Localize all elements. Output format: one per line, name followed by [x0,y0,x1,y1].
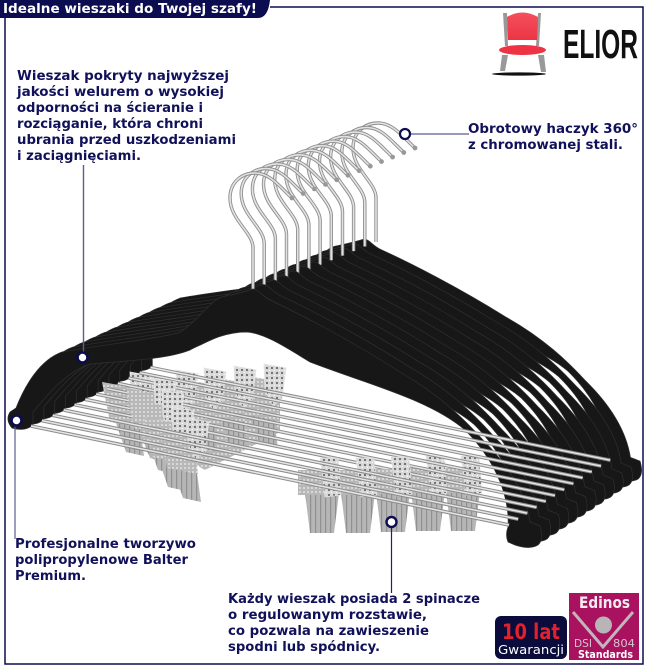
text: rotating hook description: z chromowanej stali. [468,138,623,153]
badge: 10 year warranty: Gwarancji [498,642,564,657]
badge: Edinos DSI 804 standards: Standards [578,648,633,661]
text: velour description: rozciąganie, która chroni [17,117,203,132]
callout: polypropylene marker and leader [12,416,22,539]
text: rotating hook description: Obrotowy haczyk 360° [468,122,638,137]
rear rods [74,367,610,501]
text: rotating hook description [468,122,638,153]
badge: Edinos DSI 804 standards: Edinos [579,593,630,612]
text: clips description [228,592,480,655]
text: polypropylene description: Premium. [15,569,86,584]
text: clips description: o regulowanym rozstawie, [228,608,427,623]
text: velour description: i zaciągnięciami. [17,149,141,164]
front clips, right group [298,457,412,533]
text: velour description: jakości welurem o wysokiej [16,85,224,100]
hanger stack illustration [8,123,642,548]
text: velour description [16,69,236,164]
text: polypropylene description: Profesjonalne tworzywo [15,537,196,552]
text: polypropylene description [15,537,196,584]
title banner: Idealne wieszaki do Twojej szafy! [3,2,257,17]
text: clips description: co pozwala na zawieszenie [228,624,429,639]
icon: red chair [492,12,546,76]
logo: Elior chair and wordmark [492,12,638,76]
rear clips, right group [404,456,482,531]
badge: Edinos DSI 804 standards [569,593,639,661]
text: clips description: spodni lub spódnicy. [228,640,380,655]
callout: velour marker and leader [78,165,88,362]
text: velour description: odporności na ścieranie i [17,101,203,116]
callout: clip marker and leader [386,517,396,593]
badge: Edinos DSI 804 standards: 804 [613,637,635,650]
text: velour description: ubrania przed uszkodzeniami [17,133,236,148]
text: polypropylene description: polipropylenowe Balter [15,553,189,568]
badge: 10 year warranty: 10 lat [502,620,560,644]
front rods [31,410,537,525]
callout: hook marker and leader [400,129,469,139]
hanger bodies and hooks [8,123,642,548]
front clips, left group [126,378,209,502]
badge: 10 year warranty [495,616,567,659]
text: velour description: Wieszak pokryty najwyższej [17,69,229,84]
badge: Edinos DSI 804 standards: DSI [574,637,592,650]
rear clips, left group [102,364,286,470]
text: clips description: Każdy wieszak posiada 2 spinacze [228,592,480,607]
